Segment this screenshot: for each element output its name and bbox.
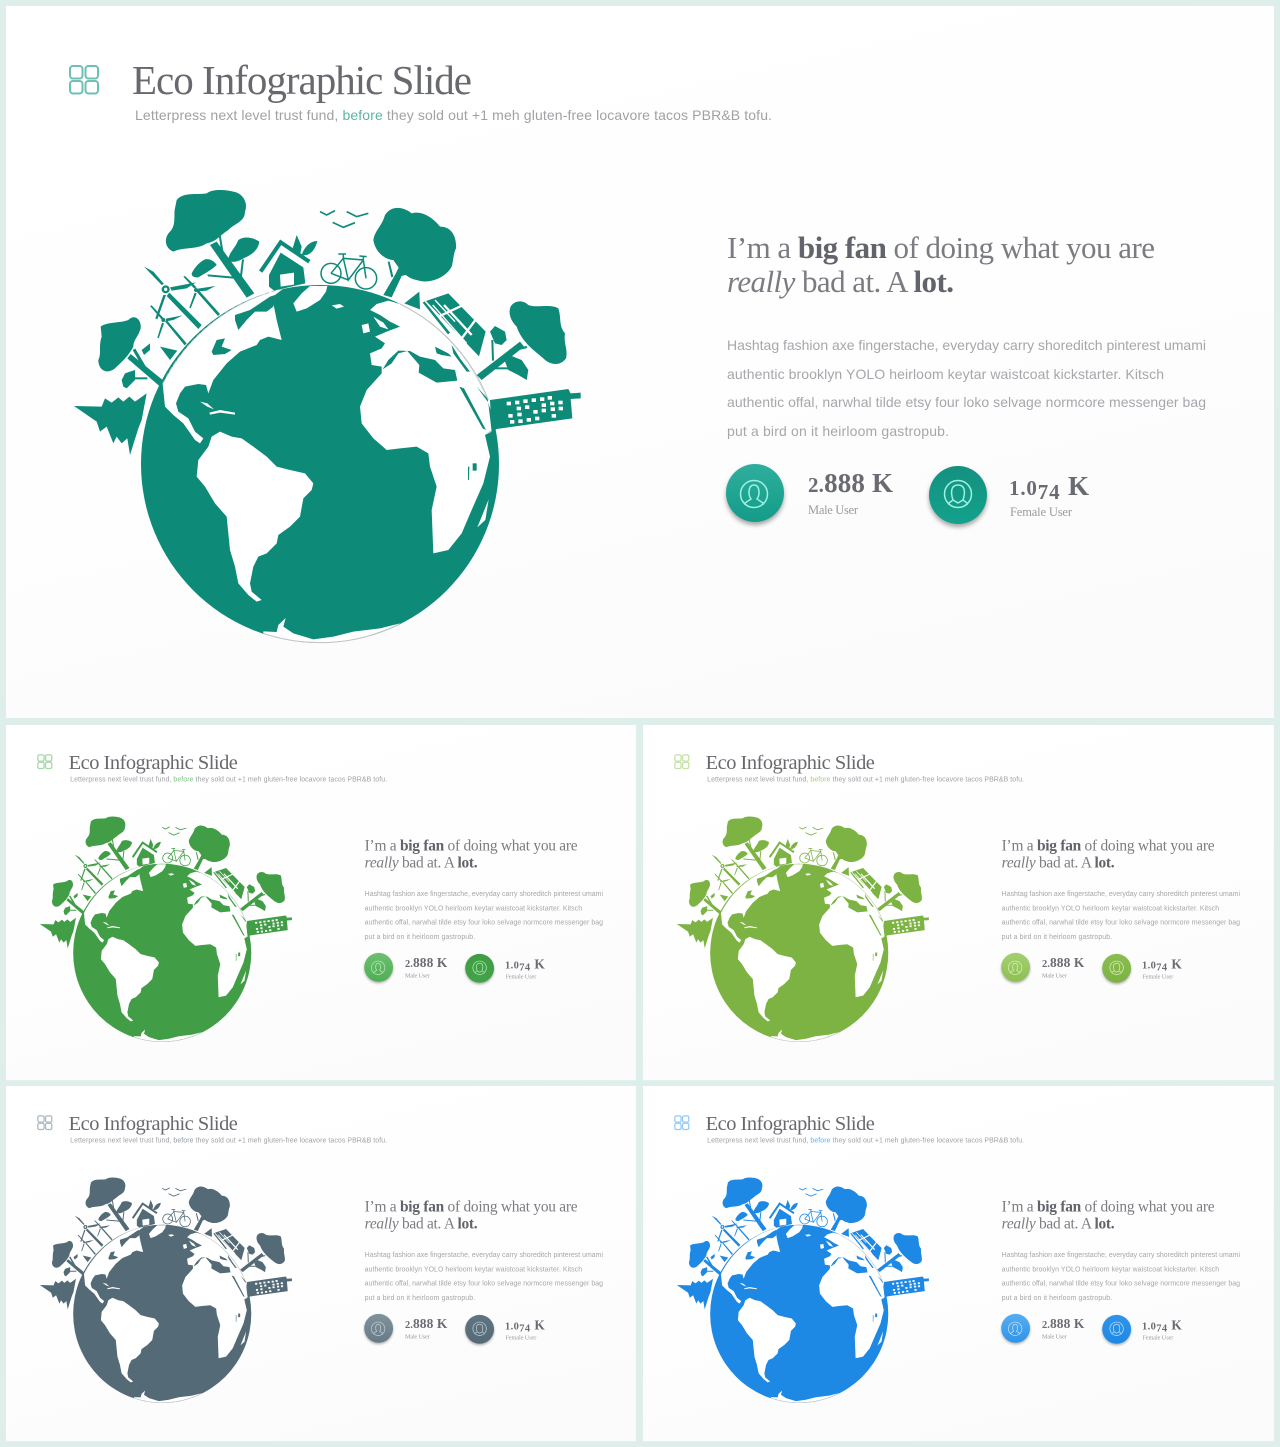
paragraph green slide: Hashtag fashion axe fingerstache, everyday carry shoreditch pinterest umami: [365, 891, 603, 898]
paragraph slate slide: authentic brooklyn YOLO heirloom keytar waistcoat kickstarter. Kitsch: [365, 1267, 582, 1274]
paragraph: Hashtag fashion axe fingerstache, everyday carry shoreditch pinterest umami: [727, 337, 1206, 353]
heading: [727, 230, 1155, 299]
paragraph green slide: put a bird on it heirloom gastropub.: [365, 934, 475, 941]
paragraph blue slide: [1002, 1252, 1240, 1302]
stat: female user green: [465, 954, 545, 984]
stat: female user lime: K: [1168, 956, 1182, 971]
title lime slide: Eco Infographic Slide: [706, 752, 875, 774]
subtitle slate slide: Letterpress next level trust fund, before they sold out +1 meh gluten-free locavore tacos PBR&B tofu.: [70, 1138, 387, 1145]
title blue slide: Eco Infographic Slide: [706, 1113, 875, 1135]
subtitle lime slide: Letterpress next level trust fund, before they sold out +1 meh gluten-free locavore tacos PBR&B tofu.: [707, 777, 1024, 784]
stat: male user lime: Male User: [1042, 973, 1068, 980]
stat: female user: Female User: [1010, 505, 1073, 519]
stat: male user blue: [1001, 1314, 1085, 1344]
stat: female user: 1.0: [1009, 476, 1037, 500]
globe illustration green: [40, 817, 292, 1042]
heading blue slide: really bad at. A lot.: [1002, 1215, 1115, 1232]
stat: male user green: [364, 953, 448, 983]
paragraph lime slide: authentic offal, narwhal tilde etsy four loko selvage normcore messenger bag: [1002, 919, 1240, 926]
icon: four squares blue: [675, 1116, 689, 1130]
stat: female user slate: [465, 1315, 545, 1345]
stat: female user lime: [1102, 954, 1182, 984]
stat: male user lime: [1001, 953, 1085, 983]
panel: green slide: [6, 725, 636, 1080]
stat: female user lime: 1.0: [1142, 960, 1156, 971]
icon: four squares green: [38, 755, 52, 769]
paragraph blue slide: Hashtag fashion axe fingerstache, everyday carry shoreditch pinterest umami: [1002, 1252, 1240, 1259]
stat: female user green: K: [531, 956, 545, 971]
subtitle blue slide: Letterpress next level trust fund, before they sold out +1 meh gluten-free locavore tacos PBR&B tofu.: [707, 1138, 1024, 1145]
globe illustration slate: [40, 1178, 292, 1403]
stat: male user slate: Male User: [405, 1334, 431, 1341]
panel: main teal slide: [6, 6, 1274, 718]
panel: lime slide: [643, 725, 1274, 1080]
stat: male user: Male User: [808, 503, 859, 517]
heading lime slide: I’m a big fan of doing what you are: [1002, 837, 1215, 854]
paragraph green slide: authentic brooklyn YOLO heirloom keytar waistcoat kickstarter. Kitsch: [365, 906, 582, 913]
stat: female user: K: [1060, 471, 1089, 501]
heading blue slide: I’m a big fan of doing what you are: [1002, 1198, 1215, 1215]
title: Eco Infographic Slide: [132, 57, 472, 103]
stat: female user slate: K: [531, 1317, 545, 1332]
stat: female user slate: Female User: [505, 1335, 537, 1342]
icon: four squares slate: [38, 1116, 52, 1130]
paragraph slate slide: [365, 1252, 603, 1302]
stat: male user lime: 2.888 K: [1042, 955, 1085, 970]
heading blue slide: [1002, 1198, 1215, 1232]
stat: female user blue: 1.0: [1142, 1321, 1156, 1332]
stat: female user blue: [1102, 1315, 1182, 1345]
panel: blue slide: [643, 1086, 1274, 1441]
stat: male user blue: Male User: [1042, 1334, 1068, 1341]
heading slate slide: really bad at. A lot.: [365, 1215, 478, 1232]
paragraph blue slide: put a bird on it heirloom gastropub.: [1002, 1295, 1112, 1302]
paragraph: authentic offal, narwhal tilde etsy four loko selvage normcore messenger bag: [727, 394, 1206, 410]
stat: female user slate: 1.0: [505, 1321, 519, 1332]
stat: male user slate: [364, 1314, 448, 1344]
stat: male user green: 2.888 K: [405, 955, 448, 970]
heading lime slide: [1002, 837, 1215, 871]
stat: female user blue: 74: [1156, 1323, 1168, 1334]
heading slate slide: [365, 1198, 578, 1232]
subtitle: Letterpress next level trust fund, before they sold out +1 meh gluten-free locavore tacos PBR&B tofu.: [135, 107, 772, 123]
stat: female user lime: Female User: [1142, 974, 1174, 981]
paragraph slate slide: authentic offal, narwhal tilde etsy four loko selvage normcore messenger bag: [365, 1280, 603, 1287]
stat: male user: 2.888 K: [808, 468, 893, 498]
paragraph lime slide: authentic brooklyn YOLO heirloom keytar waistcoat kickstarter. Kitsch: [1002, 906, 1219, 913]
paragraph lime slide: put a bird on it heirloom gastropub.: [1002, 934, 1112, 941]
heading green slide: really bad at. A lot.: [365, 854, 478, 871]
stat: female user green: 1.0: [505, 960, 519, 971]
heading: really bad at. A lot.: [727, 264, 954, 299]
icon: four squares lime: [675, 755, 689, 769]
paragraph blue slide: authentic offal, narwhal tilde etsy four loko selvage normcore messenger bag: [1002, 1280, 1240, 1287]
heading slate slide: I’m a big fan of doing what you are: [365, 1198, 578, 1215]
title slate slide: Eco Infographic Slide: [69, 1113, 238, 1135]
heading green slide: [365, 837, 578, 871]
paragraph: [727, 337, 1206, 439]
paragraph lime slide: [1002, 891, 1240, 941]
heading green slide: I’m a big fan of doing what you are: [365, 837, 578, 854]
heading lime slide: really bad at. A lot.: [1002, 854, 1115, 871]
stat: female user lime: 74: [1156, 962, 1168, 973]
stat: female user blue: Female User: [1142, 1335, 1174, 1342]
heading: I’m a big fan of doing what you are: [727, 230, 1155, 265]
globe illustration: [74, 190, 581, 643]
panel: slate slide: [6, 1086, 636, 1441]
stat: female user blue: K: [1168, 1317, 1182, 1332]
paragraph blue slide: authentic brooklyn YOLO heirloom keytar waistcoat kickstarter. Kitsch: [1002, 1267, 1219, 1274]
stat: male user: [726, 464, 893, 525]
stat: female user green: Female User: [505, 974, 537, 981]
stat: male user blue: 2.888 K: [1042, 1316, 1085, 1331]
stat: male user green: Male User: [405, 973, 431, 980]
title green slide: Eco Infographic Slide: [69, 752, 238, 774]
globe illustration lime: [677, 817, 929, 1042]
stat: female user: [929, 466, 1089, 527]
paragraph green slide: [365, 891, 603, 941]
paragraph slate slide: Hashtag fashion axe fingerstache, everyday carry shoreditch pinterest umami: [365, 1252, 603, 1259]
icon: four squares: [70, 66, 98, 94]
stat: female user slate: 74: [519, 1323, 531, 1334]
paragraph slate slide: put a bird on it heirloom gastropub.: [365, 1295, 475, 1302]
stat: female user green: 74: [519, 962, 531, 973]
paragraph green slide: authentic offal, narwhal tilde etsy four loko selvage normcore messenger bag: [365, 919, 603, 926]
subtitle green slide: Letterpress next level trust fund, before they sold out +1 meh gluten-free locavore tacos PBR&B tofu.: [70, 777, 387, 784]
paragraph: authentic brooklyn YOLO heirloom keytar waistcoat kickstarter. Kitsch: [727, 366, 1164, 382]
stat: male user slate: 2.888 K: [405, 1316, 448, 1331]
stat: female user: 74: [1038, 480, 1060, 504]
paragraph: put a bird on it heirloom gastropub.: [727, 423, 949, 439]
paragraph lime slide: Hashtag fashion axe fingerstache, everyday carry shoreditch pinterest umami: [1002, 891, 1240, 898]
globe illustration blue: [677, 1178, 929, 1403]
